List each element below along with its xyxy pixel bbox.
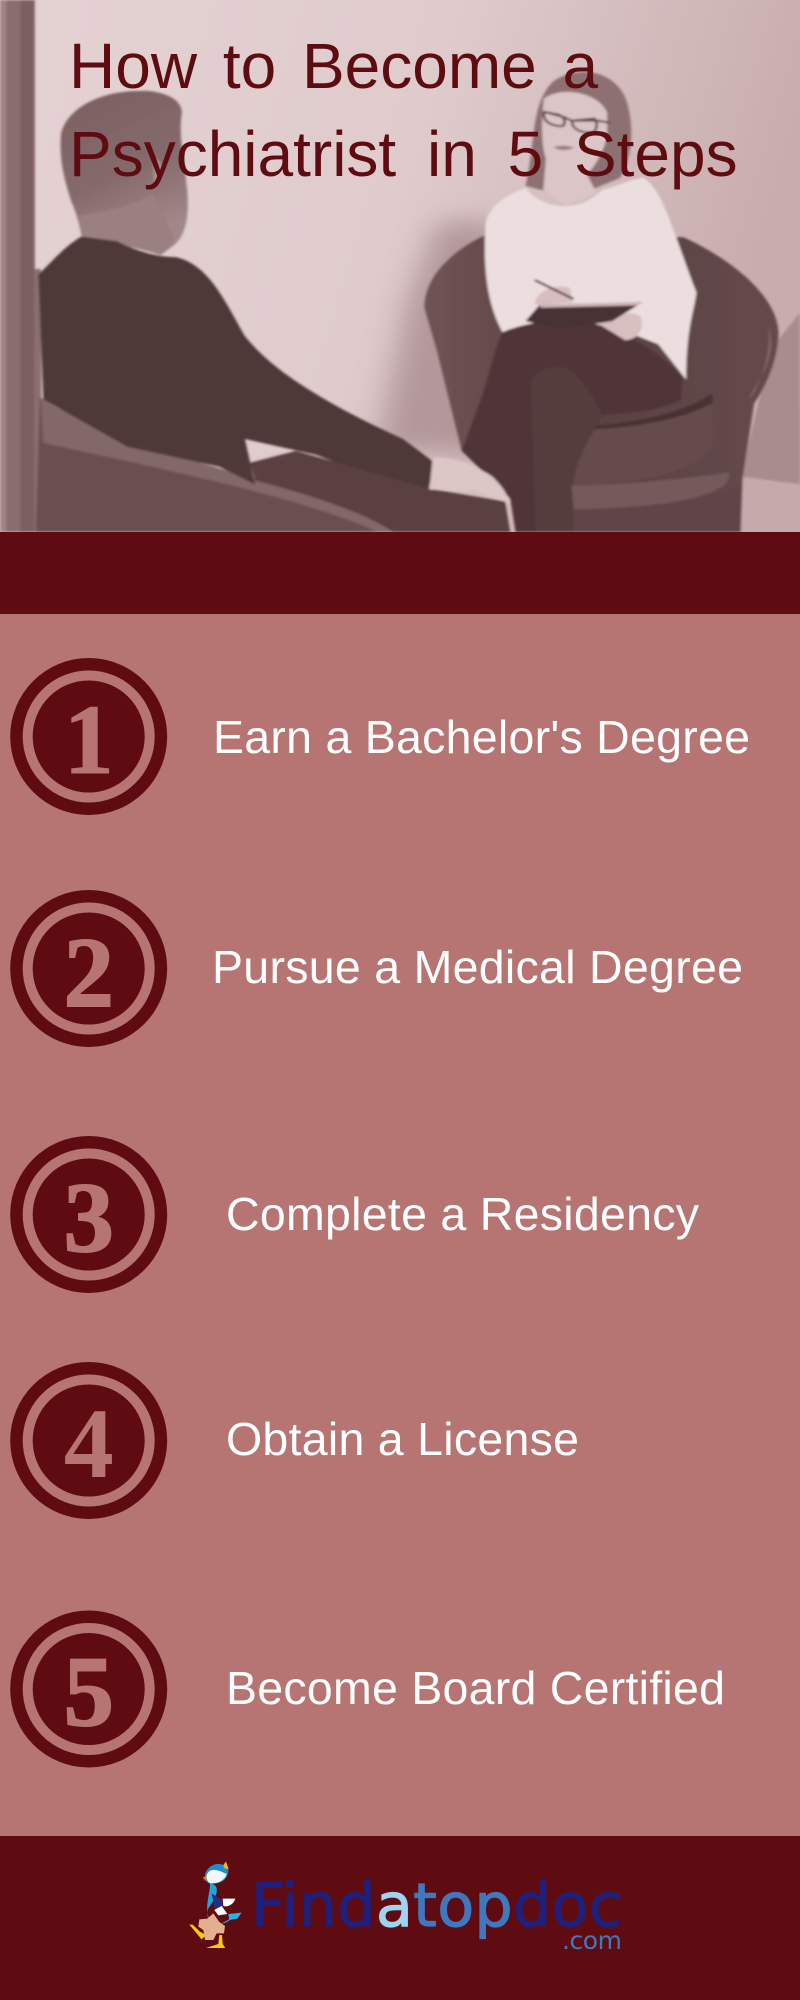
footer logo [189, 1861, 622, 1955]
logo .com: .com [562, 1926, 622, 1955]
therapist trousers [462, 321, 683, 532]
step 5 label: Become Board Certified [226, 1662, 725, 1714]
patient chair [36, 397, 393, 532]
step 3 [10, 1136, 700, 1293]
icon: number 3 badge [10, 1136, 167, 1293]
icon: number 2 badge [10, 890, 167, 1047]
door frame [4, 0, 22, 532]
step 4 [10, 1362, 579, 1519]
therapist hands, clipboard and pen [535, 286, 642, 340]
therapist hair [526, 72, 631, 198]
icon: bird mascot [189, 1861, 242, 1948]
logo wordmark: Findatopdoc [251, 1871, 622, 1941]
icon: number 5 badge: 5 [64, 1636, 114, 1747]
patient sweater [38, 237, 435, 490]
step 5 [10, 1610, 725, 1768]
carpet and floor [741, 312, 800, 484]
icon: number 3 badge: 3 [64, 1162, 114, 1273]
title [69, 30, 738, 190]
title: Psychiatrist in 5 Steps [69, 118, 738, 190]
icon: number 4 badge: 4 [64, 1388, 114, 1499]
patient head [61, 91, 188, 255]
step 1 [10, 658, 750, 815]
icon: number 1 badge [10, 658, 167, 815]
seat cushions [575, 424, 654, 484]
title: How to Become a [69, 30, 599, 102]
therapist face [542, 92, 607, 206]
glasses [543, 112, 610, 133]
band under photo [0, 532, 800, 614]
icon: number 5 badge [10, 1610, 167, 1768]
icon: number 4 badge [10, 1362, 167, 1519]
step 3 label: Complete a Residency [226, 1188, 700, 1240]
step 2 label: Pursue a Medical Degree [212, 941, 743, 993]
step 4 label: Obtain a License [226, 1413, 579, 1465]
step 2 [10, 890, 743, 1047]
therapist chair [424, 235, 779, 532]
step 1 label: Earn a Bachelor's Degree [213, 711, 750, 763]
patient legs [250, 451, 510, 532]
icon: number 2 badge: 2 [64, 917, 114, 1028]
therapist sweater [485, 178, 696, 380]
footer band [0, 1836, 800, 2000]
patient hand [430, 457, 509, 503]
icon: number 1 badge: 1 [64, 684, 114, 795]
photo: therapist and patient in duotone [0, 0, 800, 532]
